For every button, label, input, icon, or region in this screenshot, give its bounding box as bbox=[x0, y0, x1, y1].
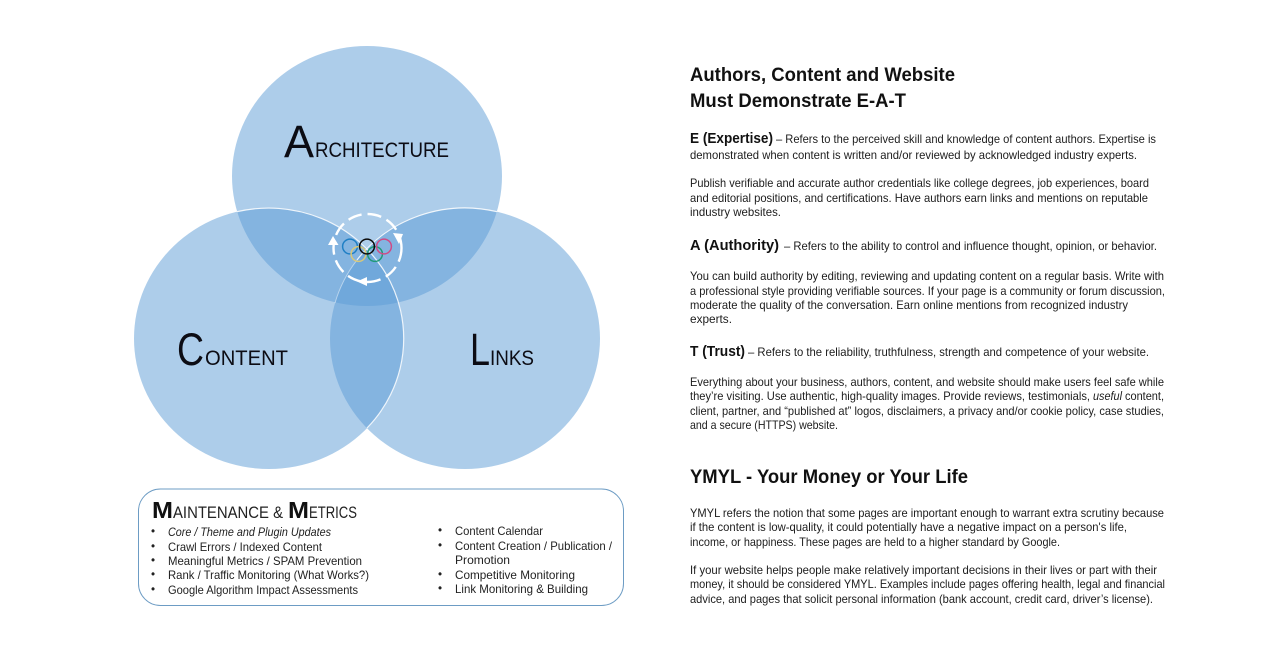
list: left column bbox=[151, 525, 369, 597]
heading: maintenance and metrics bbox=[152, 497, 357, 523]
label: links: INKS bbox=[490, 346, 534, 370]
icon: dashed cycle with arrows bbox=[328, 214, 403, 286]
text block: trust bbox=[690, 344, 1164, 432]
label: links bbox=[470, 324, 534, 375]
arrow: down right bbox=[393, 233, 403, 244]
heading: maintenance and metrics: AINTENANCE & bbox=[173, 504, 283, 522]
text block: ymyl: money, it should be considered YMYL. Examples include pages offering health, legal and financial bbox=[690, 578, 1165, 591]
label: links: L bbox=[470, 324, 490, 375]
list: right column: • bbox=[438, 568, 442, 581]
text block: trust: client, partner, and “published at” logos, disclaimers, a privacy and/or cookie policy, case studies, bbox=[690, 405, 1164, 418]
text block: ymyl: if the content is low-quality, it could potentially have a negative impact on a person's life, bbox=[690, 521, 1127, 534]
text block: authority: A (Authority) bbox=[690, 238, 779, 254]
list: left column: Core / Theme and Plugin Updates bbox=[168, 526, 331, 539]
heading: authors, content and website: Must Demonstrate E-A-T bbox=[690, 91, 906, 112]
text block: trust: useful bbox=[1093, 390, 1122, 403]
list: right column: Content Creation / Publication / bbox=[455, 540, 613, 553]
text block: trust: T (Trust) bbox=[690, 344, 745, 360]
list: left column: Google Algorithm Impact Assessments bbox=[168, 584, 358, 597]
heading: maintenance and metrics: M bbox=[288, 497, 309, 523]
list: right column bbox=[438, 524, 613, 596]
list: right column: • bbox=[438, 539, 442, 552]
text block: authority: You can build authority by editing, reviewing and updating content on a regular basis. Write with bbox=[690, 270, 1164, 283]
list: left column: • bbox=[151, 525, 155, 538]
text block: expertise: Publish verifiable and accurate author credentials like college degrees, job experiences, board bbox=[690, 177, 1149, 190]
heading: authors, content and website bbox=[690, 65, 955, 112]
list: right column: • bbox=[438, 582, 442, 595]
list: left column: Meaningful Metrics / SPAM Prevention bbox=[168, 555, 362, 568]
heading: maintenance and metrics: M bbox=[152, 497, 173, 523]
heading: authors, content and website: Authors, Content and Website bbox=[690, 65, 955, 86]
label: content: ONTENT bbox=[205, 346, 288, 370]
text block: trust: they’re visiting. Use authentic, high-quality images. Provide reviews, testimonials, bbox=[690, 390, 1090, 403]
panel: maintenance and metrics bbox=[138, 489, 624, 606]
text block: expertise: E (Expertise) bbox=[690, 131, 773, 147]
label: architecture: RCHITECTURE bbox=[315, 138, 449, 162]
text block: ymyl: income, or happiness. These pages are held to a higher standard by Google. bbox=[690, 536, 1060, 549]
list: right column: Content Calendar bbox=[455, 525, 543, 538]
list: right column: Link Monitoring & Building bbox=[455, 583, 588, 596]
list: right column: Promotion bbox=[455, 554, 510, 567]
heading: maintenance and metrics: ETRICS bbox=[309, 504, 357, 522]
text block: expertise: and editorial positions, and certifications. Have authors earn links and mentions on reputable bbox=[690, 192, 1148, 205]
outline: content circle arc bbox=[237, 208, 404, 428]
list: right column: • bbox=[438, 524, 442, 537]
text block: ymyl: advice, and pages that solicit personal information (bank account, credit card, driver’s license). bbox=[690, 593, 1153, 606]
text block: trust: – Refers to the reliability, truthfulness, strength and competence of your website. bbox=[748, 346, 1149, 359]
circle: links bbox=[330, 208, 600, 469]
label: content bbox=[177, 324, 288, 375]
arrow: left bottom bbox=[357, 277, 367, 286]
outline: links circle faint lower arc bbox=[335, 260, 357, 303]
list: left column: • bbox=[151, 554, 155, 567]
outline: links circle upper arc bbox=[357, 208, 497, 260]
text block: authority bbox=[690, 238, 1165, 326]
text block: ymyl: If your website helps people make relatively important decisions in their lives or part with their bbox=[690, 564, 1157, 577]
circle: content bbox=[134, 208, 404, 469]
text block: trust: and a secure (HTTPS) website. bbox=[690, 419, 838, 432]
heading: ymyl: YMYL - Your Money or Your Life bbox=[690, 467, 968, 488]
list: left column: • bbox=[151, 568, 155, 581]
list: left column: • bbox=[151, 583, 155, 596]
icon: olympic rings bbox=[343, 239, 391, 261]
list: left column: • bbox=[151, 540, 155, 553]
label: architecture: A bbox=[284, 116, 314, 167]
label: content: C bbox=[177, 324, 204, 375]
text block: ymyl: YMYL refers the notion that some pages are important enough to warrant extra scrutiny because bbox=[690, 507, 1164, 520]
text block: authority: experts. bbox=[690, 313, 732, 326]
text block: trust: Everything about your business, authors, content, and website should make users feel safe while bbox=[690, 376, 1164, 389]
arrow: up left bbox=[328, 236, 338, 245]
text block: authority: a professional style providing verifiable sources. If your page is a community or forum discussion, bbox=[690, 285, 1165, 298]
text block: expertise: demonstrated when content is written and/or reviewed by acknowledged industry experts. bbox=[690, 149, 1137, 162]
list: left column: Crawl Errors / Indexed Content bbox=[168, 541, 323, 554]
text block: trust: content, bbox=[1125, 390, 1164, 403]
circle: architecture bbox=[232, 46, 502, 306]
text block: authority: – Refers to the ability to control and influence thought, opinion, or behavior. bbox=[784, 240, 1157, 253]
text block: expertise: – Refers to the perceived skill and knowledge of content authors. Expertise is bbox=[776, 133, 1156, 146]
text block: ymyl bbox=[690, 507, 1165, 606]
text block: expertise: industry websites. bbox=[690, 206, 781, 219]
list: left column: Rank / Traffic Monitoring (What Works?) bbox=[168, 569, 369, 582]
label: architecture bbox=[284, 116, 449, 167]
text block: expertise bbox=[690, 131, 1156, 219]
list: right column: Competitive Monitoring bbox=[455, 569, 575, 582]
venn diagram bbox=[134, 46, 600, 469]
text block: authority: moderate the quality of the conversation. Earn online mentions from recognized industry bbox=[690, 299, 1128, 312]
